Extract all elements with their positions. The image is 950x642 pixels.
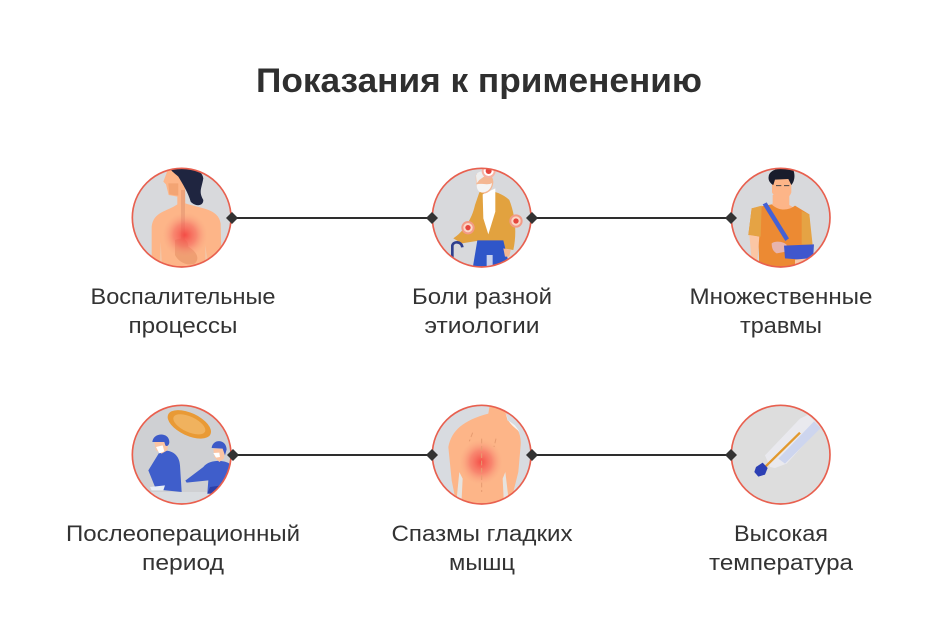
- connector: bottom row left: [227, 449, 438, 461]
- label: postoperative period: период: [142, 550, 224, 575]
- icon: back with muscle spasm: [432, 404, 531, 505]
- icon: elderly man with cane: [432, 164, 531, 268]
- label: inflammatory processes: Воспалительные: [90, 284, 276, 309]
- label: inflammatory processes: процессы: [128, 313, 238, 338]
- icon: man with arm in sling: [731, 168, 830, 268]
- icon: torso with inflamed stomach: [132, 167, 231, 268]
- label: inflammatory processes: [90, 284, 276, 338]
- icon: thermometer: [731, 405, 830, 504]
- title: Показания к применению: [256, 62, 702, 100]
- label: smooth muscle spasms: [392, 521, 572, 575]
- label: postoperative period: Послеоперационный: [66, 521, 300, 546]
- label: smooth muscle spasms: Спазмы гладких: [392, 521, 572, 546]
- connector: top row right: [526, 212, 737, 224]
- connector: bottom row right: [526, 449, 737, 461]
- label: pains of various etiology: Боли разной: [412, 284, 552, 309]
- label: multiple injuries: [690, 284, 872, 338]
- label: high temperature: температура: [709, 550, 854, 575]
- connector: top row left: [226, 212, 438, 224]
- label: high temperature: [709, 521, 854, 575]
- label: multiple injuries: Множественные: [690, 284, 872, 309]
- label: multiple injuries: травмы: [740, 313, 822, 338]
- label: pains of various etiology: этиологии: [424, 313, 540, 338]
- label: pains of various etiology: [412, 284, 552, 338]
- label: postoperative period: [66, 521, 300, 575]
- icon: surgeons in operating room: [132, 404, 233, 505]
- label: high temperature: Высокая: [734, 521, 828, 546]
- label: smooth muscle spasms: мышц: [449, 550, 515, 575]
